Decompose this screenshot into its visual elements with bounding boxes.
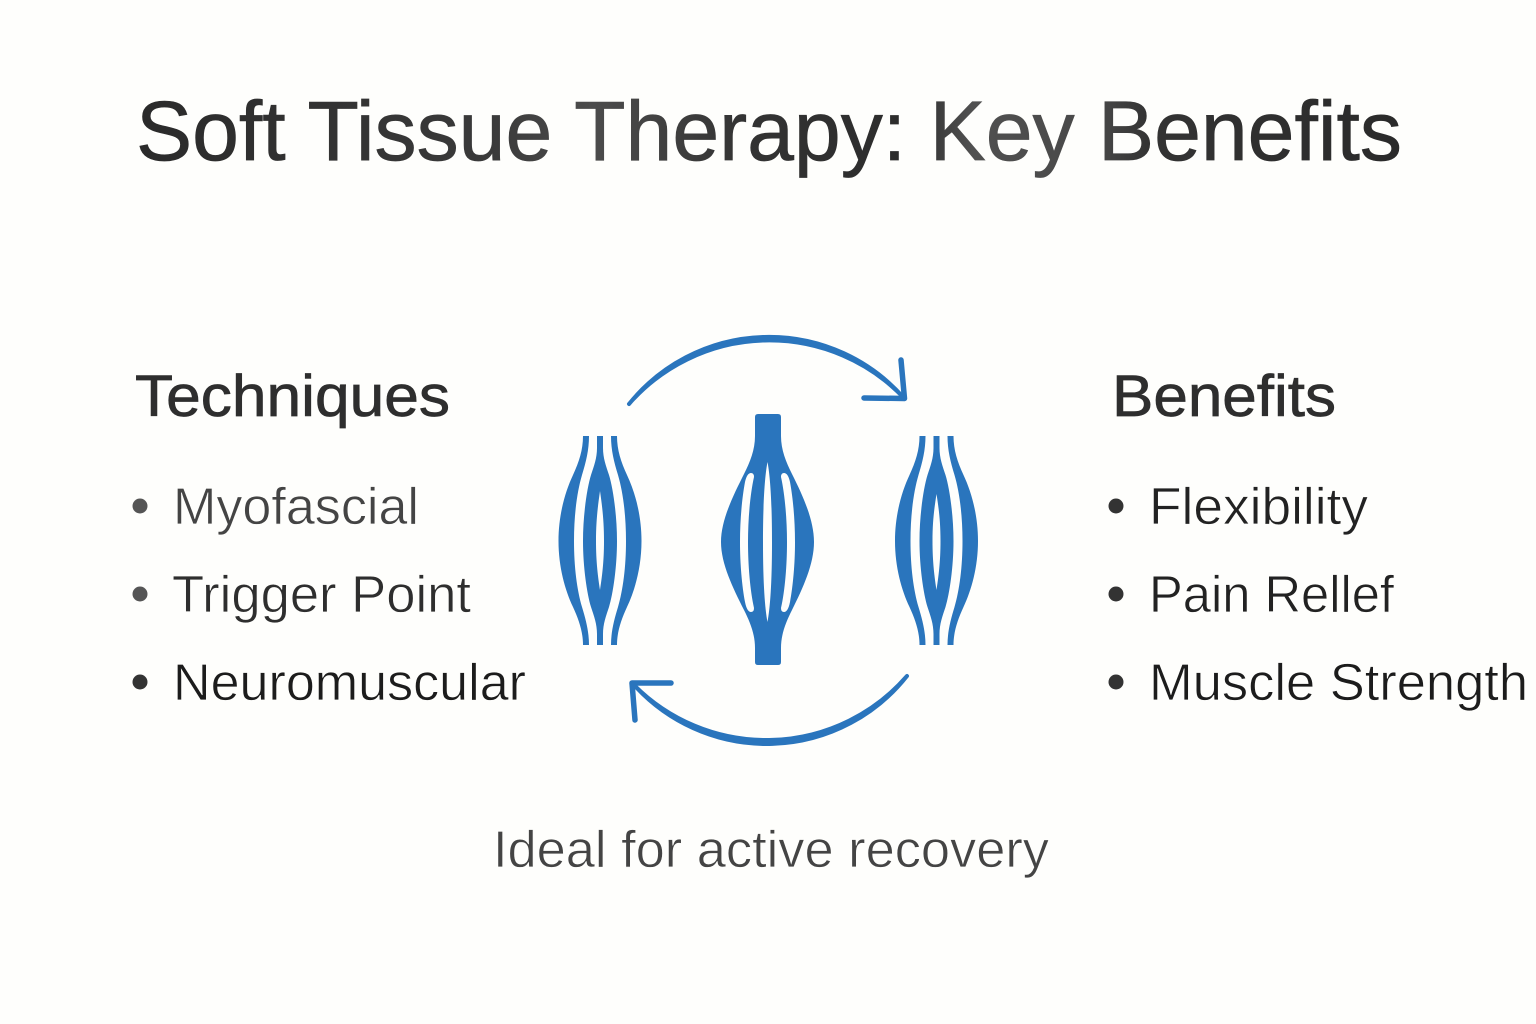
list item: pain relief: Pain Rellef: [1149, 566, 1395, 624]
list item: myofascial: Myofascial: [173, 478, 419, 536]
list item: neuromuscular: Neuromuscular: [173, 654, 526, 712]
icon: muscle cycle diagram: [558, 337, 978, 744]
list item: flexibility: Flexibility: [1149, 478, 1368, 536]
caption: Ideal for active recovery: [493, 821, 1049, 879]
icon: center muscle: [721, 414, 814, 665]
icon: left muscle: [558, 436, 642, 645]
arrow: bottom clockwise: [632, 676, 907, 744]
heading: benefits: Benefits: [1112, 364, 1336, 429]
panel: benefits: [1108, 364, 1528, 712]
heading: techniques: Techniques: [135, 364, 450, 429]
title: Soft Tissue Therapy: Key Benefits: [136, 84, 1402, 178]
arrow: top clockwise: [629, 337, 904, 404]
icon: right muscle: [895, 436, 978, 645]
list item: muscle strength: Muscle Strength: [1149, 654, 1528, 712]
panel: techniques: [132, 364, 526, 712]
list item: trigger point: Trigger Point: [172, 566, 472, 624]
